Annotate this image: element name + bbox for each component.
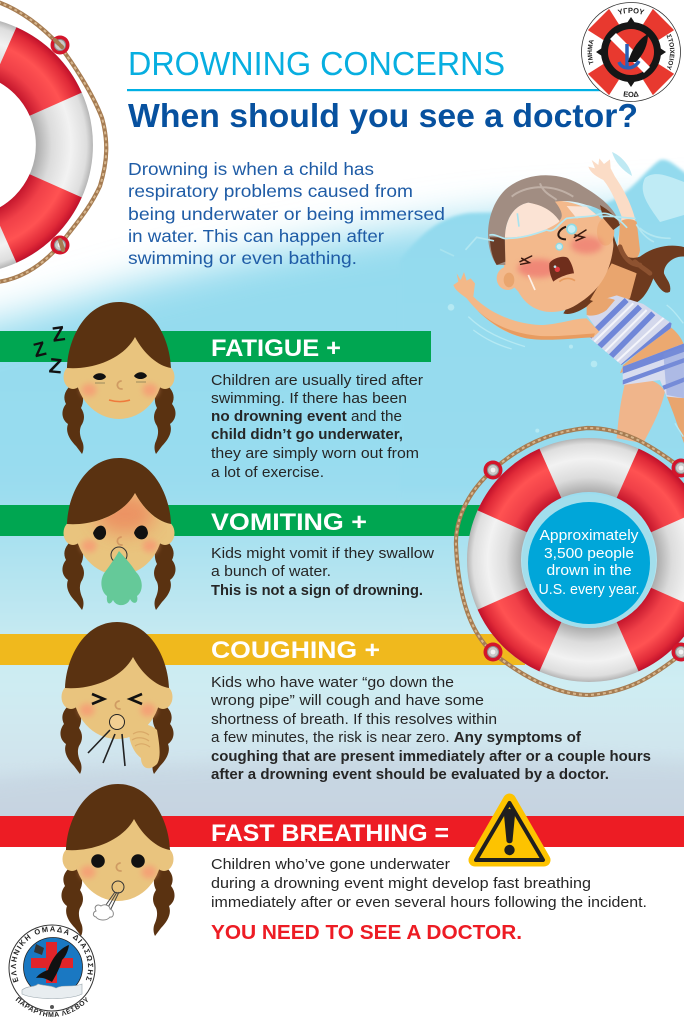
icon: warning triangle	[475, 800, 544, 860]
intro paragraph: in water. This can happen after	[128, 226, 384, 246]
section: fast breathing text: immediately after or even several hours following the incident.	[211, 895, 647, 911]
section: fast breathing text: YOU NEED TO SEE A DOCTOR.	[211, 922, 522, 944]
blush	[518, 259, 559, 278]
section: fatigue text: no drowning event and the	[211, 409, 402, 425]
logo: hydro section: ΣΤΟΙΧΕΙΟΥ	[666, 34, 674, 70]
callout: statistic: drown in the	[546, 563, 632, 579]
logo: hydro section: ΕΟΔ	[624, 91, 639, 98]
band: coughing	[0, 634, 525, 665]
section: fatigue text: Children are usually tired after	[211, 373, 423, 389]
logo: hydro section: ΥΓΡΟΥ	[618, 8, 644, 14]
character: coughing	[60, 622, 174, 774]
callout: statistic: U.S. every year.	[538, 582, 640, 598]
callout: statistic: Approximately	[540, 528, 639, 544]
character: fast breathing	[61, 784, 175, 936]
section: fast breathing text: FAST BREATHING =	[211, 820, 449, 847]
midriff	[620, 327, 684, 373]
band: fast breathing	[0, 816, 684, 847]
logo: hydro section: ΤΜΗΜΑ	[588, 40, 594, 65]
section: vomiting text: This is not a sign of drowning.	[211, 583, 423, 599]
droplets	[448, 304, 454, 311]
section: vomiting text: Kids might vomit if they swallow	[211, 546, 435, 562]
character: fatigue	[62, 302, 176, 454]
right life ring	[456, 428, 684, 695]
section: coughing text: COUGHING +	[211, 637, 380, 664]
section: coughing text: a few minutes, the risk is near zero. Any symptoms of	[211, 730, 581, 746]
title rule	[127, 89, 602, 91]
illustration: drowning girl	[440, 158, 684, 443]
section: fast breathing text: Children who’ve gone underwater	[211, 857, 450, 873]
eyes	[520, 256, 532, 264]
logo: rescue team	[8, 924, 96, 1017]
intro paragraph: respiratory problems caused from	[128, 181, 413, 201]
section: fast breathing text	[211, 820, 647, 944]
leg	[617, 379, 665, 443]
band: vomiting	[0, 505, 480, 536]
neck	[590, 263, 637, 307]
left life ring	[0, 2, 106, 282]
intro paragraph	[128, 159, 445, 268]
section: fatigue text: swimming. If there has been	[211, 391, 407, 407]
section: fatigue text	[211, 335, 423, 481]
logo: hydro section	[581, 2, 681, 102]
swimsuit top	[586, 296, 672, 365]
section: vomiting text: a bunch of water.	[211, 564, 331, 580]
intro paragraph: Drowning is when a child has	[128, 159, 374, 179]
ear	[497, 267, 519, 290]
logo: rescue team: ΠΑΡΑΡΤΗΜΑ ΛΕΣΒΟΥ	[16, 996, 88, 1017]
section: fatigue text: FATIGUE +	[211, 335, 341, 362]
callout: statistic	[522, 494, 656, 628]
icon: zzz: Z	[31, 338, 48, 362]
head	[503, 200, 613, 312]
character: vomiting	[62, 458, 176, 610]
intro paragraph: swimming or even bathing.	[128, 248, 357, 268]
swimsuit bottom	[622, 344, 684, 398]
bubbles	[567, 224, 576, 234]
hair	[488, 175, 620, 265]
logo: rescue team: ΕΛΛΗΝΙΚΗ ΟΜΑΔΑ ΔΙΑΣΩΣΗΣ	[10, 926, 94, 983]
back hair	[563, 233, 684, 314]
section: coughing text: wrong pipe” will cough and have some	[210, 693, 484, 709]
subtitle: When should you see a doctor?	[128, 97, 638, 134]
mouth	[549, 257, 574, 282]
section: fast breathing text: during a drowning event might develop fast breathing	[211, 876, 591, 892]
water line	[466, 213, 670, 249]
section: coughing text: after a drowning event should be evaluated by a doctor.	[211, 767, 609, 783]
section: fatigue text: they are simply worn out from	[211, 446, 419, 462]
left arm	[453, 272, 599, 339]
chest skin	[587, 298, 615, 316]
section: coughing text: shortness of breath. If this resolves within	[211, 712, 497, 728]
icon: zzz: Z	[51, 322, 67, 347]
callout: statistic: 3,500 people	[544, 546, 634, 562]
title: DROWNING CONCERNS	[128, 45, 505, 82]
section: vomiting text: VOMITING +	[211, 509, 367, 536]
section: coughing text: coughing that are present immediately after or a couple hours	[211, 749, 651, 765]
section: coughing text	[210, 637, 651, 783]
intro paragraph: being underwater or being immersed	[128, 204, 445, 224]
section: fatigue text: child didn’t go underwater,	[211, 427, 403, 443]
raised arm	[588, 158, 639, 260]
forehead	[505, 203, 559, 237]
section: vomiting text	[211, 509, 435, 599]
section: coughing text: Kids who have water “go down the	[211, 675, 454, 691]
icon: zzz	[31, 322, 67, 379]
icon: zzz: Z	[48, 354, 63, 379]
section: fatigue text: a lot of exercise.	[211, 465, 324, 481]
band: fatigue	[0, 331, 431, 362]
